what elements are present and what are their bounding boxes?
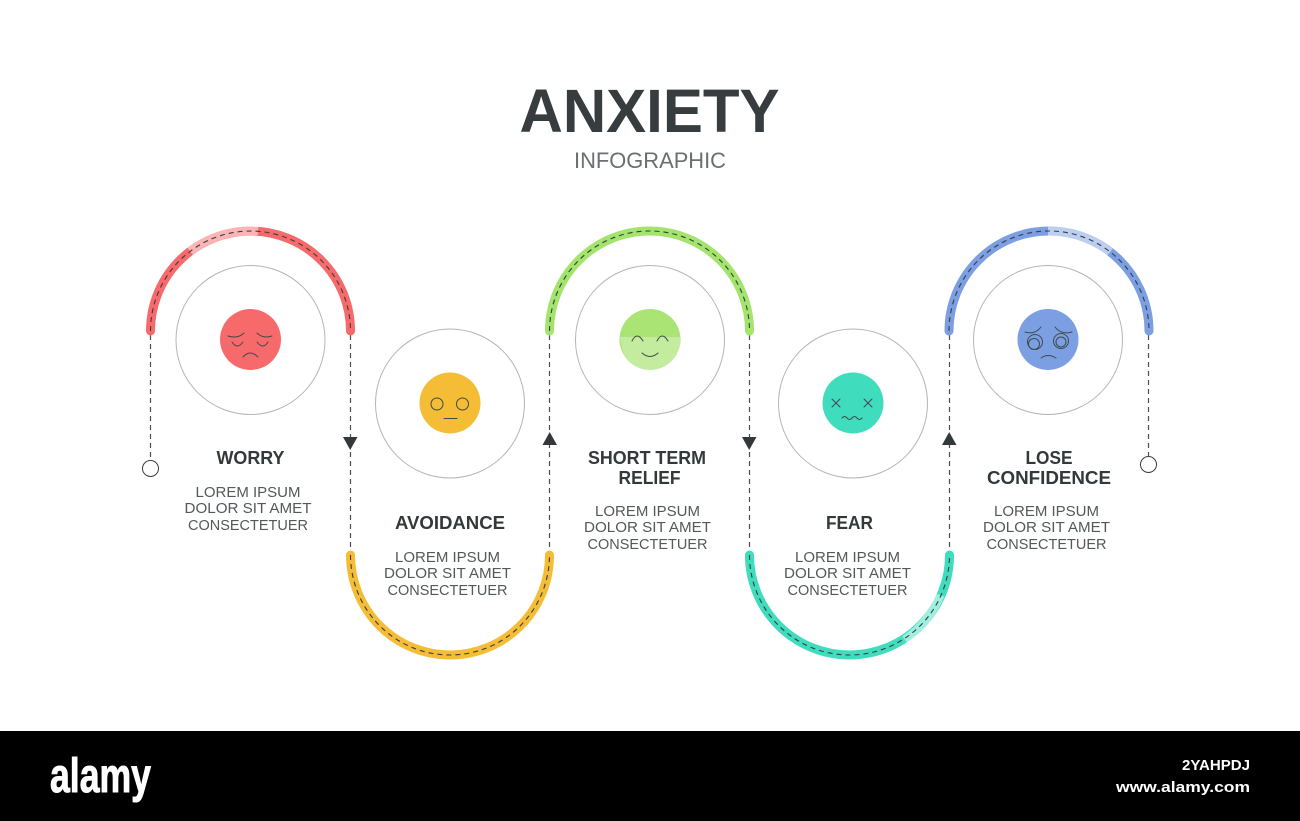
text: lose confidence description xyxy=(983,504,1110,553)
text: fear description: LOREM IPSUM xyxy=(795,550,900,566)
text: avoidance description: DOLOR SIT AMET xyxy=(384,566,511,582)
arc: fear xyxy=(750,555,950,655)
connector: avoidance to short term relief with up arrow xyxy=(542,335,557,552)
arc: short term relief xyxy=(550,231,750,331)
footer url: www.alamy.com xyxy=(1115,779,1250,796)
title: ANXIETY xyxy=(520,77,780,146)
footer image id: 2YAHPDJ xyxy=(1182,758,1250,774)
text: worry description: CONSECTETUER xyxy=(188,518,308,534)
label: lose confidence: CONFIDENCE xyxy=(987,468,1111,488)
connector: worry to avoidance with down arrow xyxy=(343,335,358,552)
text: avoidance description: CONSECTETUER xyxy=(388,583,508,599)
connector: end line with open circle xyxy=(1140,335,1156,472)
connector: fear to lose confidence with up arrow xyxy=(942,335,956,552)
footer logo: alamy xyxy=(50,750,151,803)
text: short term relief description: DOLOR SIT AMET xyxy=(584,520,711,536)
text: fear description: CONSECTETUER xyxy=(788,583,908,599)
label: short term relief: RELIEF xyxy=(618,468,680,488)
arc: lose confidence xyxy=(949,231,1149,331)
arc: worry xyxy=(150,231,350,331)
label: fear: FEAR xyxy=(826,513,873,533)
label: worry: WORRY xyxy=(216,448,284,468)
text: worry description: LOREM IPSUM xyxy=(196,485,300,501)
connector: start line with open circle xyxy=(142,335,158,476)
text: short term relief description: CONSECTETUER xyxy=(588,537,708,553)
text: worry description xyxy=(184,485,312,534)
text: short term relief description xyxy=(584,504,711,553)
icon: pleading face xyxy=(1018,309,1078,370)
arc: avoidance xyxy=(350,555,550,655)
step: short term relief xyxy=(550,231,750,553)
connector: short term relief to fear with down arrow xyxy=(742,335,756,552)
text: fear description xyxy=(784,550,911,599)
step: avoidance xyxy=(350,329,550,655)
text: lose confidence description: CONSECTETUER xyxy=(986,537,1106,553)
icon: smiling face xyxy=(620,309,680,370)
label: avoidance: AVOIDANCE xyxy=(395,513,505,533)
label: lose confidence xyxy=(987,448,1111,488)
icon: worried face xyxy=(220,309,281,370)
text: lose confidence description: LOREM IPSUM xyxy=(994,504,1099,520)
label: lose confidence: LOSE xyxy=(1026,448,1072,468)
footer bar xyxy=(0,731,1300,821)
ring: lose confidence xyxy=(974,266,1122,414)
text: fear description: DOLOR SIT AMET xyxy=(784,566,911,582)
step: fear xyxy=(750,329,950,655)
label: short term relief xyxy=(588,448,706,488)
text: avoidance description: LOREM IPSUM xyxy=(395,550,500,566)
ring: fear xyxy=(778,329,928,478)
text: worry description: DOLOR SIT AMET xyxy=(184,501,312,517)
ring: worry xyxy=(176,266,325,414)
title: INFOGRAPHIC xyxy=(574,148,726,173)
ring: short term relief xyxy=(576,266,724,414)
text: short term relief description: LOREM IPSUM xyxy=(595,504,700,520)
label: short term relief: SHORT TERM xyxy=(588,448,706,468)
icon: dizzy face xyxy=(822,372,884,434)
text: lose confidence description: DOLOR SIT AMET xyxy=(983,520,1110,536)
step: worry xyxy=(150,231,350,534)
step: lose confidence xyxy=(949,231,1149,553)
text: avoidance description xyxy=(384,550,511,599)
ring: avoidance xyxy=(376,329,524,478)
icon: blank face xyxy=(420,372,480,434)
